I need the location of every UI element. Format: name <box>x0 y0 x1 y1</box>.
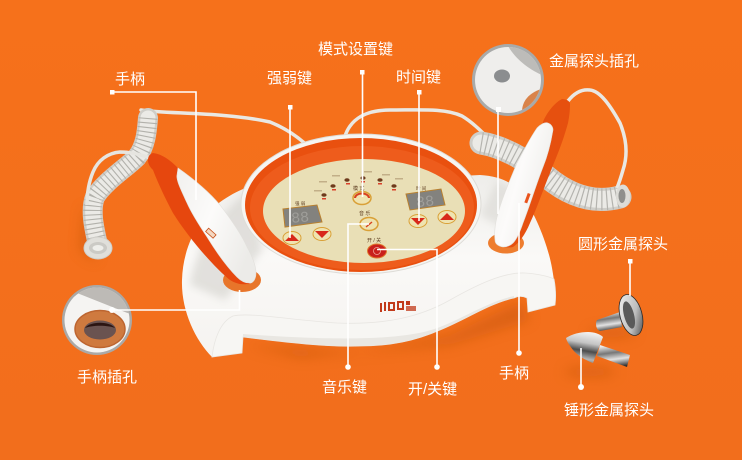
label: 手柄插孔: 手柄插孔 <box>77 369 137 386</box>
right handle <box>495 99 570 247</box>
power button <box>367 237 386 258</box>
label: 圆形金属探头: 圆形金属探头 <box>578 236 668 253</box>
label: 锤形金属探头: 锤形金属探头 <box>564 402 654 419</box>
label: 手柄 right: 手柄 <box>499 365 529 382</box>
label: 开/关键: 开/关键 <box>408 381 457 398</box>
power button: 开 / 关 <box>367 237 381 244</box>
handle socket left <box>223 268 261 292</box>
beige panel <box>263 159 465 263</box>
device base <box>182 175 556 357</box>
round metal probe <box>596 292 647 338</box>
left handle <box>148 153 256 284</box>
base foot band <box>212 273 556 357</box>
right coiled cord <box>481 90 630 208</box>
infographic: product diagram <box>62 41 668 417</box>
display: time <box>406 185 445 212</box>
hammer metal probe <box>566 332 630 367</box>
inset: handle socket <box>60 285 134 355</box>
display: time: 88 <box>415 193 435 212</box>
shadows <box>80 205 636 377</box>
label: 金属探头插孔: 金属探头插孔 <box>549 53 639 70</box>
mode button: 模 式 <box>353 185 364 192</box>
logo on base <box>380 301 416 312</box>
label: 模式设置键: 模式设置键 <box>318 41 393 58</box>
display: time: 时 间 <box>416 185 427 192</box>
music button: 音 乐 <box>359 210 370 217</box>
label: 音乐键: 音乐键 <box>322 379 367 396</box>
foot inner shade <box>243 296 514 346</box>
control dial <box>241 134 481 274</box>
label: 时间键: 时间键 <box>396 69 441 86</box>
inset: metal probe socket <box>472 44 544 116</box>
mode indicators <box>314 171 403 200</box>
display: strength <box>283 201 322 228</box>
leader dots <box>109 70 632 390</box>
display: strength: 88 <box>291 209 310 228</box>
mode button <box>353 185 371 204</box>
handle socket right <box>488 232 524 254</box>
buttons <box>283 210 456 244</box>
leader lines <box>112 72 630 387</box>
music button <box>359 210 378 230</box>
left coiled cord <box>84 118 150 259</box>
base shading around dial <box>190 180 525 300</box>
label: 手柄 left: 手柄 <box>115 71 145 88</box>
display: strength: 强 弱 <box>295 201 306 207</box>
label: 强弱键: 强弱键 <box>267 70 312 87</box>
cord: top connecting cords <box>141 110 488 150</box>
